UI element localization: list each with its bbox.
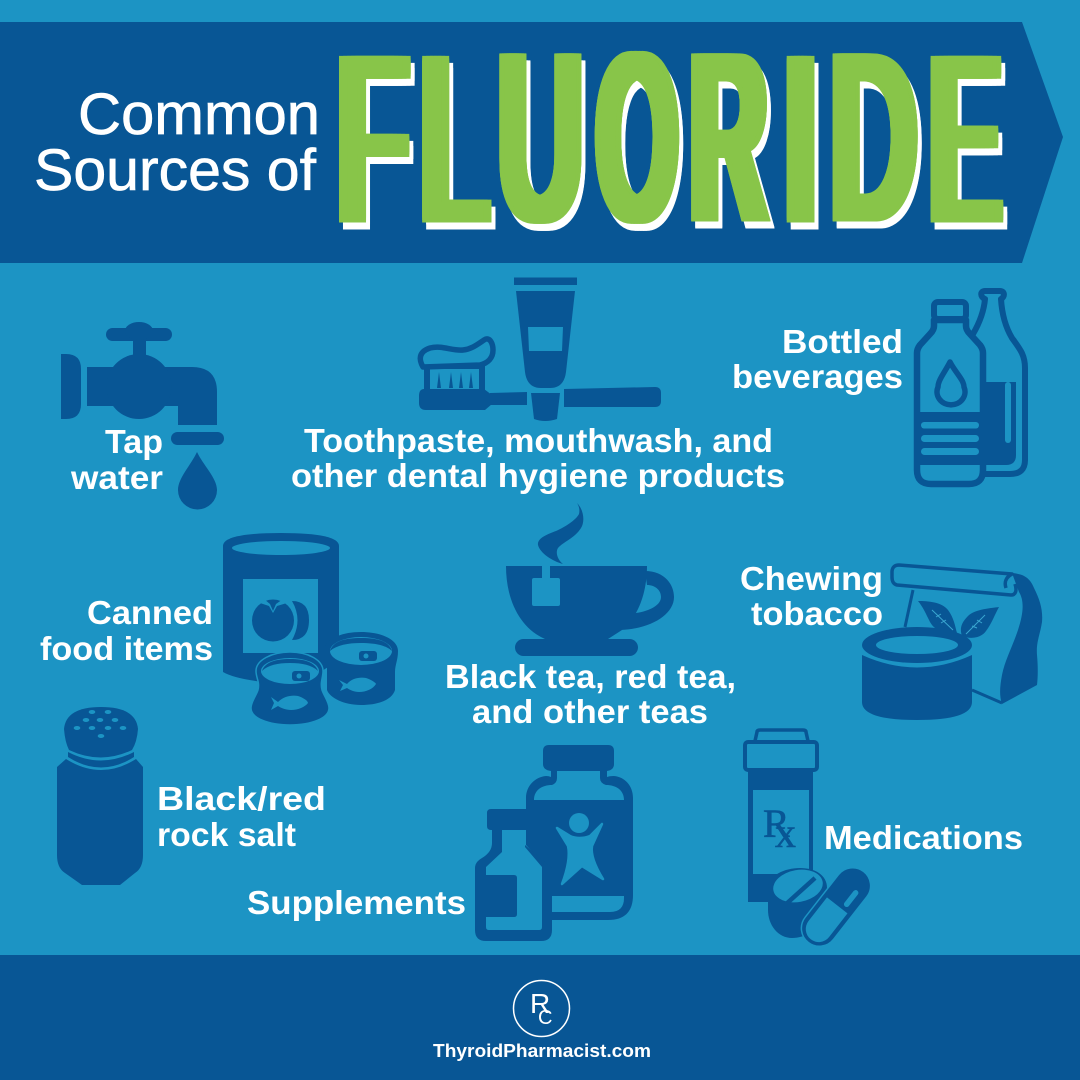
heading: Common Sources of: Common (78, 82, 320, 147)
label: Medications: Medications (824, 819, 1023, 856)
title: FLUORIDE: E (931, 7, 999, 270)
title: FLUORIDE: D (829, 2, 918, 273)
label: Black tea, red tea, and other teas: Black tea, red tea, (445, 658, 736, 695)
header banner arrow (0, 22, 1063, 263)
icon: tap with water drop (61, 322, 224, 510)
label: Black/red rock salt: rock salt (157, 816, 296, 853)
icon detail: Rx symbol: x (775, 811, 796, 857)
logo: RC monogram circle: C (538, 1007, 552, 1029)
title: FLUORIDE: O (596, 2, 678, 273)
icon: tea cup with tea bag and steam (506, 503, 674, 656)
label: Toothpaste, mouthwash, and other dental hygiene products (291, 422, 785, 494)
icon: supplement bottles (475, 745, 633, 941)
label: Toothpaste, mouthwash, and other dental hygiene products: Toothpaste, mouthwash, and (304, 422, 773, 459)
label: Chewing tobacco: Chewing (740, 560, 883, 597)
title: FLUORIDE: L (420, 7, 488, 270)
title: FLUORIDE (338, 2, 1008, 273)
title: FLUORIDE: F (338, 7, 407, 270)
label: Canned food items: Canned (87, 594, 213, 631)
icon: food cans (223, 533, 398, 725)
label: Black/red rock salt (157, 780, 326, 853)
title: FLUORIDE: I (781, 7, 820, 270)
label: Black tea, red tea, and other teas (445, 658, 736, 730)
label: Supplements: Supplements (247, 884, 466, 921)
icon: toothbrush and toothpaste tube (419, 278, 661, 421)
label: Tap water (70, 423, 163, 496)
icon: chewing tobacco pouch and tin (862, 565, 1042, 720)
logo: RC monogram circle: R (530, 988, 550, 1019)
title: FLUORIDE: U (497, 2, 583, 273)
label: Canned food items (40, 594, 213, 667)
label: Bottled beverages: beverages (732, 358, 903, 395)
footer band (0, 955, 1080, 1080)
icon: plastic and glass bottles (914, 291, 1025, 484)
label: Chewing tobacco: tobacco (751, 595, 883, 632)
icon: prescription bottle and pills (745, 730, 878, 954)
label: Toothpaste, mouthwash, and other dental hygiene products: other dental hygiene products (291, 457, 785, 494)
label: Bottled beverages: Bottled (782, 323, 903, 360)
heading: Common Sources of: Sources of (34, 138, 317, 203)
label: Chewing tobacco (740, 560, 883, 632)
icon detail: Rx symbol: R (763, 801, 790, 846)
label: Canned food items: food items (40, 630, 213, 667)
title: FLUORIDE: R (690, 2, 767, 273)
label: Bottled beverages (732, 323, 903, 395)
label: Tap water: water (70, 459, 163, 496)
label: Black tea, red tea, and other teas: and other teas (472, 693, 708, 730)
logo: RC monogram circle (514, 980, 570, 1036)
heading: Common Sources of (34, 82, 320, 203)
footer website: ThyroidPharmacist.com: ThyroidPharmacist.com (433, 1040, 651, 1061)
icon detail: Rx symbol (763, 801, 796, 857)
icon: salt shaker (57, 707, 143, 885)
label: Black/red rock salt: Black/red (157, 780, 326, 817)
label: Tap water: Tap (105, 423, 163, 460)
